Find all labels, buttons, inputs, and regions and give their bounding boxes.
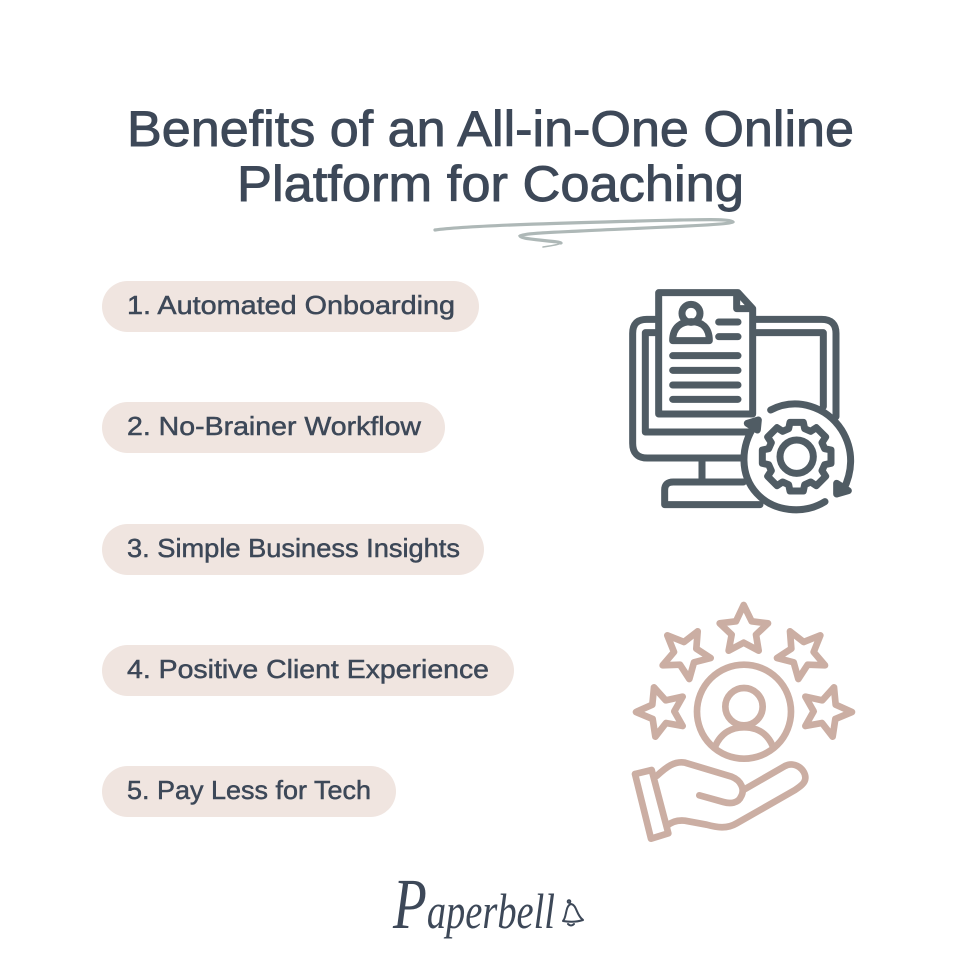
icon: logo bell	[563, 900, 583, 926]
star top	[720, 605, 768, 651]
list item 1	[102, 281, 479, 332]
list item 2	[102, 402, 445, 453]
person circle	[697, 665, 791, 759]
document	[659, 293, 753, 414]
star lower left	[636, 687, 683, 737]
gear	[762, 422, 831, 491]
list item 2: 2. No-Brainer Workflow	[127, 411, 421, 441]
monitor stand and base	[665, 458, 760, 505]
list item 1: 1. Automated Onboarding	[127, 290, 455, 320]
title: Benefits of an All-in-One Online	[127, 101, 854, 157]
star lower right	[805, 687, 852, 737]
monitor inner screen	[645, 333, 823, 432]
list item 5: 5. Pay Less for Tech	[127, 775, 371, 805]
title underline swoosh	[435, 220, 733, 247]
monitor outer frame	[633, 319, 836, 458]
star upper right	[777, 631, 825, 679]
hand	[657, 762, 743, 803]
icon: monitor with document and gear	[633, 293, 851, 510]
icon: hand holding person with five stars	[635, 605, 852, 839]
rotation arrows	[744, 404, 851, 510]
document person	[673, 322, 709, 341]
document text lines	[673, 322, 738, 399]
list item 5	[102, 766, 396, 817]
list item 3: 3. Simple Business Insights	[127, 533, 460, 563]
list item 4	[102, 645, 514, 696]
title: Platform for Coaching	[237, 156, 744, 212]
logo: Paperbell wordmark: Paperbell	[392, 864, 555, 944]
list item 3	[102, 524, 484, 575]
list item 4: 4. Positive Client Experience	[127, 654, 489, 684]
star upper left	[663, 631, 711, 679]
title	[127, 101, 854, 212]
